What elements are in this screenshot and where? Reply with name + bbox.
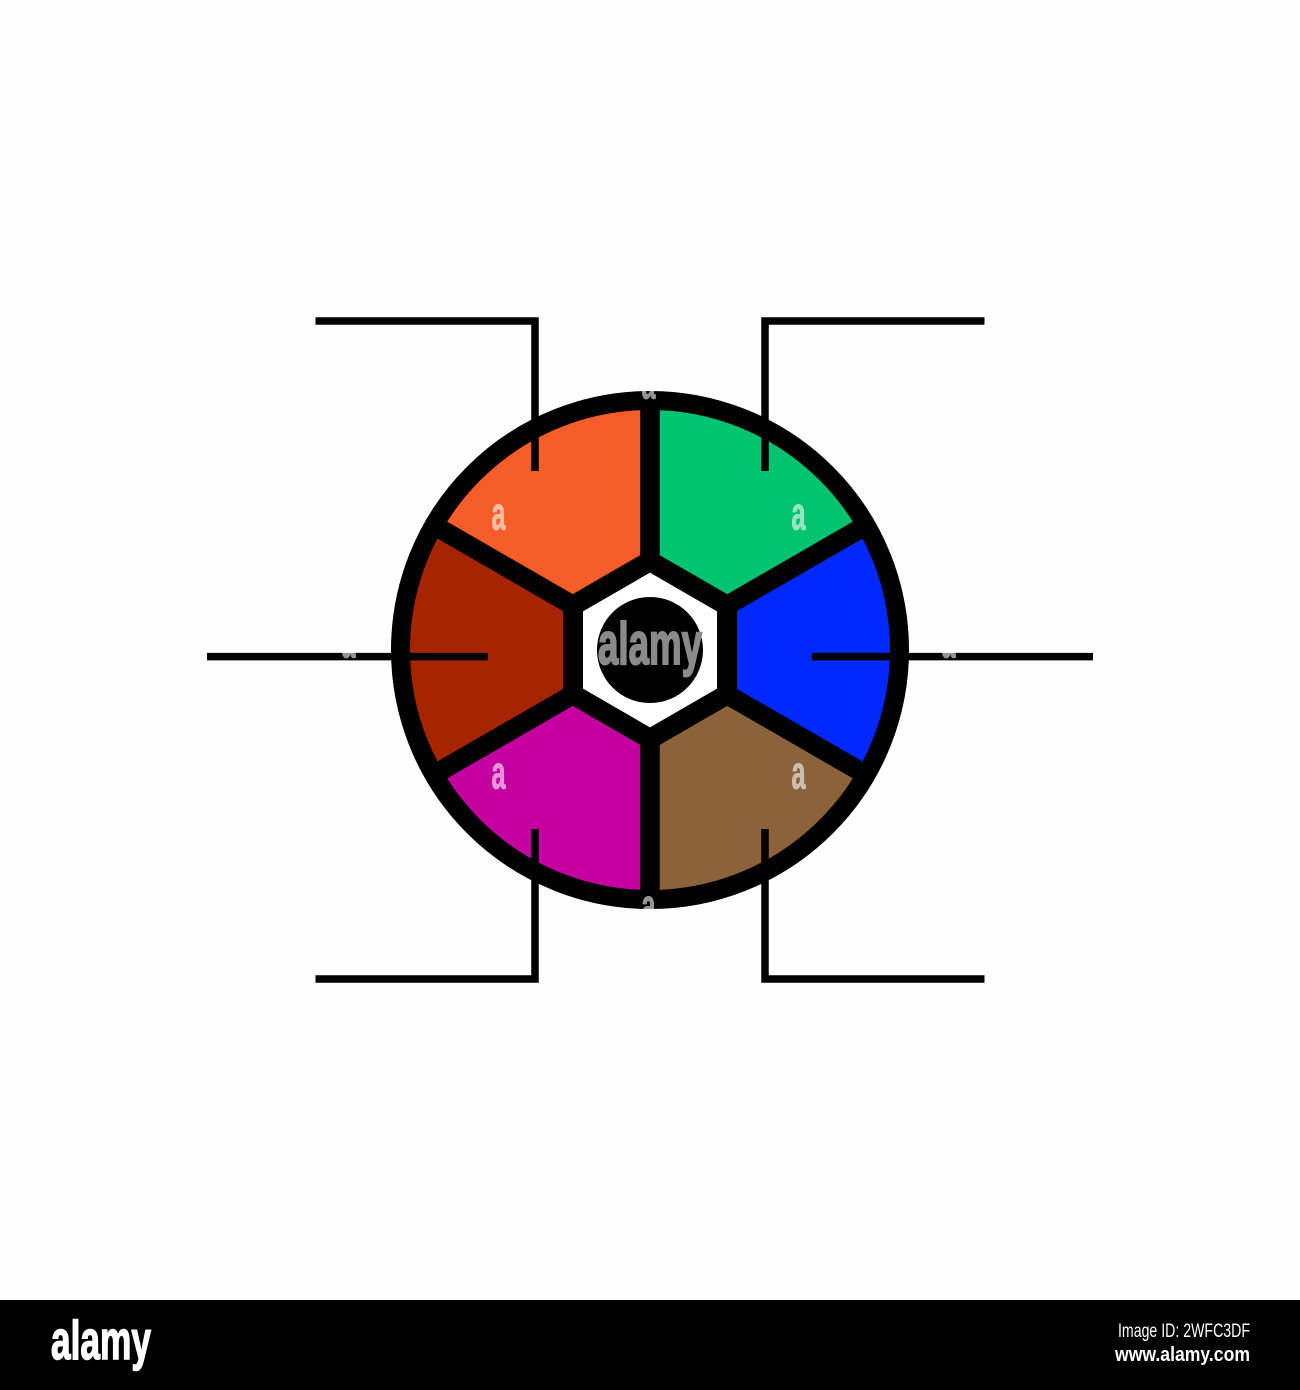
website: www.alamy.com [1114,1344,1250,1366]
watermark letters: a [342,616,356,668]
center hexagon [573,561,727,739]
callout line: bottom left [316,829,535,979]
segment: blue [650,528,895,772]
segment: dark red [405,528,650,772]
spokes [433,400,867,900]
segment: orange [438,405,650,650]
watermark letters: a [492,746,506,798]
watermark letters: a [492,488,506,540]
callout line: right [812,653,1093,660]
watermark letters: a [642,880,656,932]
callout line: left [207,653,488,660]
watermark letters [342,356,956,932]
callout line: top left [316,321,535,471]
callout line: top right [765,321,984,471]
watermark letters: a [792,488,806,540]
outer ring [400,400,900,900]
segment: green [650,405,862,650]
image id: Image ID: 2WFC3DF [1118,1321,1250,1342]
watermark letters: a [792,746,806,798]
callout line: bottom right [765,829,984,979]
footer logo: alamy [51,1309,151,1371]
segment: brown [650,650,862,895]
wheel diagram [400,400,900,900]
footer bar [0,1300,1300,1390]
watermark letters: a [642,356,656,408]
watermark: center: alamy [598,611,702,677]
segment: magenta [438,650,650,895]
watermark letters: a [942,616,956,668]
center circle [597,597,703,703]
